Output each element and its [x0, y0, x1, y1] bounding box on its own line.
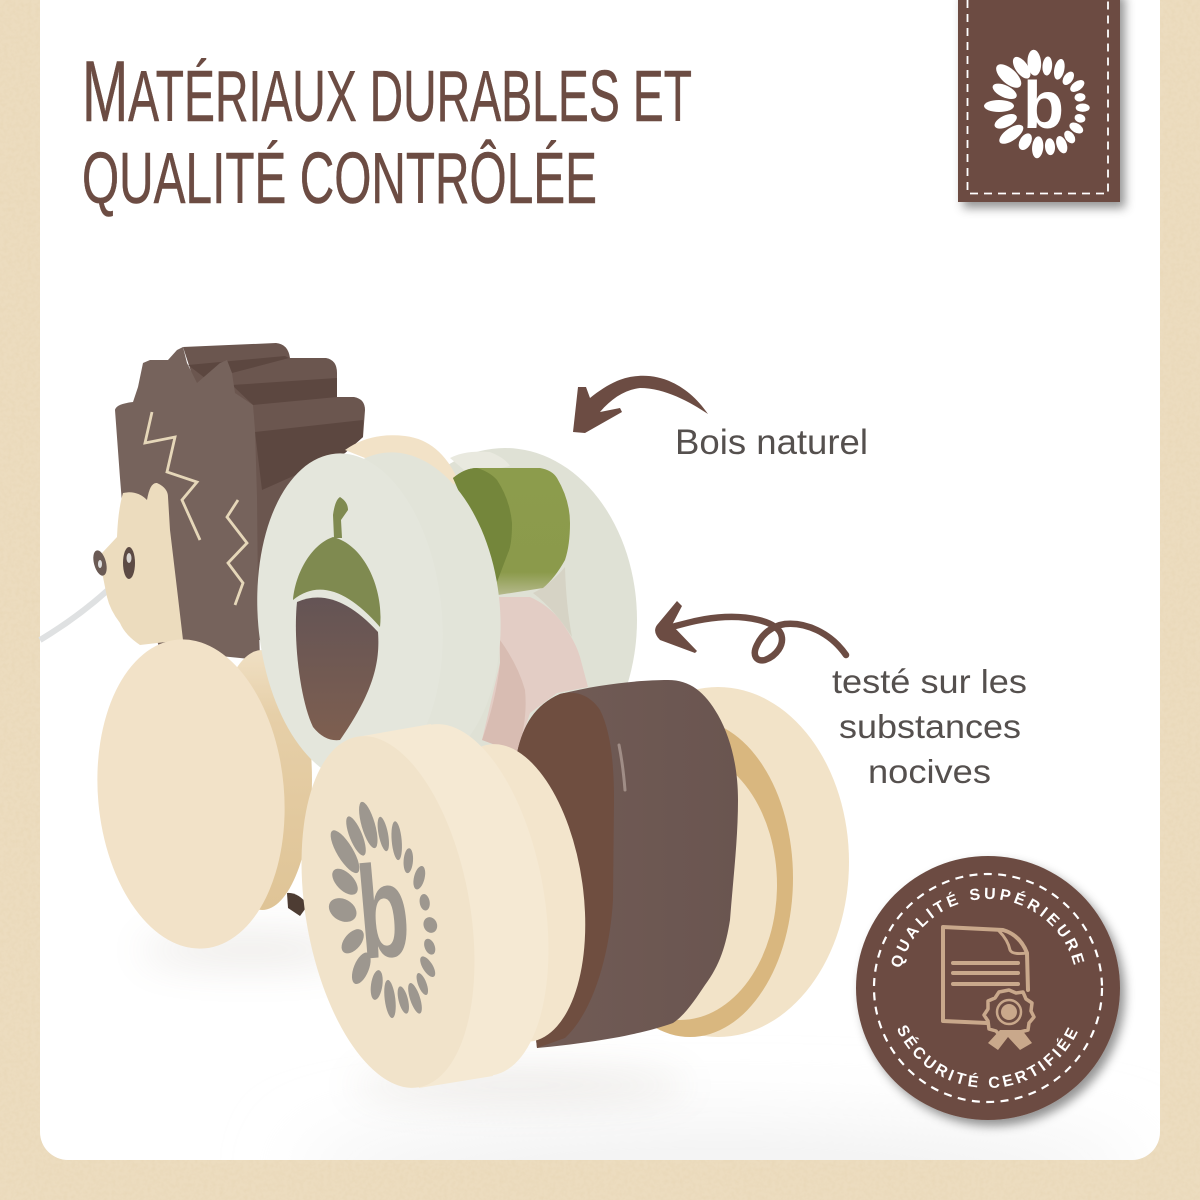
top cream disc — [345, 435, 458, 500]
right wheel — [583, 687, 849, 1037]
label: Bois naturel: Bois naturel — [675, 423, 868, 462]
toy: wooden hedgehog pull toy — [40, 343, 849, 1102]
pull string — [40, 590, 108, 640]
icon: brand logo: b — [1023, 68, 1064, 143]
main disc with acorn — [244, 444, 514, 790]
hedgehog face — [95, 483, 183, 645]
ground shadows — [140, 934, 690, 1101]
icon: certificate document — [943, 927, 1034, 1050]
title: MATÉRIAUX DURABLES ET — [82, 44, 692, 140]
label: testé sur les substances nocives: nocives — [868, 753, 991, 790]
brown block — [517, 680, 738, 1048]
quality badge — [854, 856, 1132, 1132]
icon: acorn — [293, 497, 381, 740]
green block — [453, 468, 570, 595]
brand tag with logo — [958, 0, 1120, 202]
icon: brand logo — [984, 49, 1090, 159]
badge text: bottom arc: SÉCURITÉ CERTIFIÉE — [898, 1025, 1078, 1088]
hedgehog body — [115, 347, 260, 660]
rear wheel — [85, 631, 312, 957]
label: testé sur les substances nocives: testé sur les — [832, 663, 1027, 700]
back disc — [373, 448, 637, 792]
badge text: top arc: QUALITÉ SUPÉRIEURE — [892, 888, 1084, 967]
label: testé sur les substances nocives — [832, 663, 1027, 790]
pink block — [482, 597, 588, 753]
title — [82, 44, 692, 219]
arrow: towards natural wood — [573, 376, 708, 433]
hedgehog eye and nose — [91, 547, 135, 579]
title: QUALITÉ CONTRÔLÉE — [82, 139, 597, 219]
arrow: towards tested surface — [655, 601, 846, 660]
hedgehog spikes extruded side — [183, 343, 365, 640]
front wheel — [276, 710, 603, 1102]
label: testé sur les substances nocives: substances — [839, 708, 1021, 745]
icon: brand mark on wheel — [325, 800, 439, 1019]
icon: brand mark on wheel: b — [352, 837, 415, 988]
hedgehog quills drawing — [145, 412, 247, 605]
